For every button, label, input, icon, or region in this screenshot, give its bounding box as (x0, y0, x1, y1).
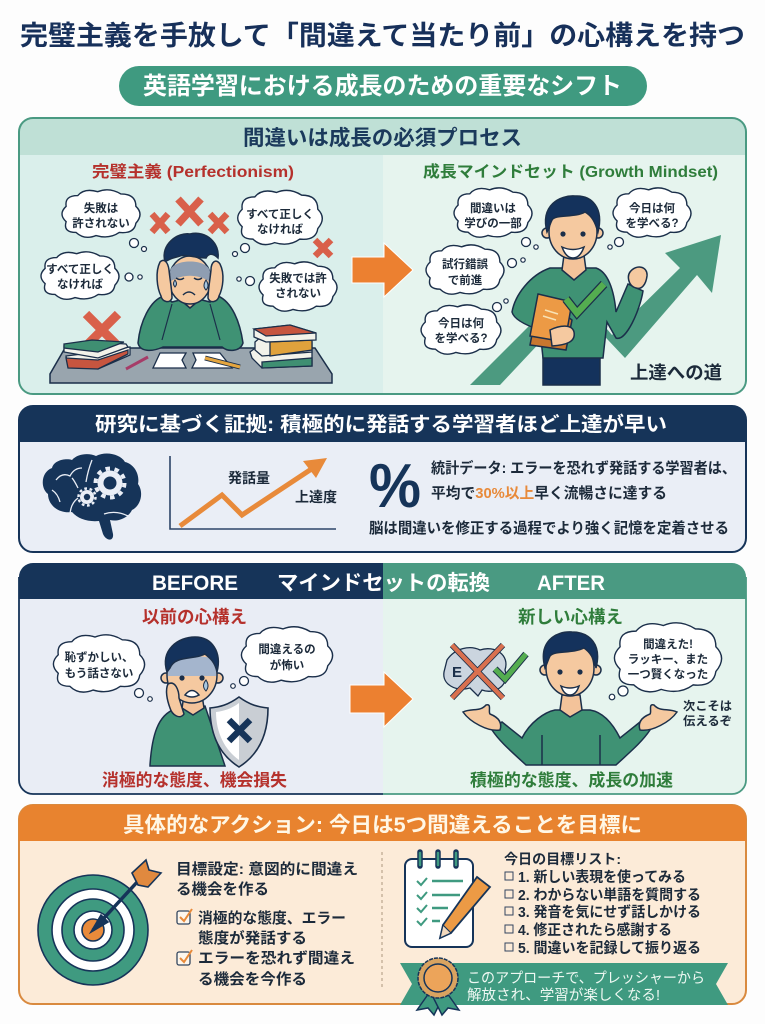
subtitle pill (119, 66, 647, 106)
icon: error speech bubble crossed out: E (452, 664, 462, 681)
thought bubble: 今日は何を学べる bottom (421, 299, 508, 354)
checklist item two: エラーを恐れず間違え (198, 949, 355, 967)
panel: concrete action (19, 805, 746, 1015)
thought bubble: 失敗では許されない: 失敗では許 (269, 271, 327, 285)
icon: medal (417, 958, 459, 1015)
thought bubble: 恥ずかしい: もう話さない (65, 666, 133, 680)
thought bubble: 間違えるのが怖い: 間違えるの (258, 642, 316, 656)
thought bubble: すべて正しくなければ left (41, 252, 142, 299)
thought bubble: 今日は何を学べる bottom: 今日は何 (438, 316, 484, 330)
thought bubble: 失敗は許されない (62, 190, 146, 252)
panel heading: 研究に基づく証拠: 積極的に発話する学習者ほど上達が早い (95, 412, 667, 436)
goal text: る機会を作る (176, 881, 269, 898)
panel: mistakes are essential (19, 118, 746, 394)
torn paper, pen and pencil (126, 353, 240, 369)
header: mindset shift: マインドセットの転換 (277, 572, 490, 595)
line chart: 上達度 (295, 489, 337, 505)
arrow: before to after (350, 672, 413, 727)
icon: shield with X (210, 697, 268, 767)
thought bubble: 間違えるのが怖い: が怖い (270, 658, 304, 672)
thought bubble: 間違いは学びの一部: 間違いは (470, 201, 516, 215)
thought bubble: 失敗では許されない: されない (275, 287, 321, 300)
ribbon banner (400, 963, 728, 1005)
confident student (512, 196, 647, 385)
checklist item one: 態度が発話する (198, 929, 307, 947)
icon: target with arrow (38, 860, 161, 985)
thought bubble: 間違えた: 間違えた! (643, 637, 693, 651)
desk (50, 348, 332, 383)
arrow: perfectionism to growth (352, 243, 413, 297)
checklist item two (177, 949, 355, 988)
goal list heading: 今日の目標リスト: (504, 851, 621, 867)
after heading: 新しい心構え (518, 607, 623, 627)
side note: 次こそは伝えるぞ: 伝えるぞ (683, 714, 732, 728)
thought bubble: 間違いは学びの一部 (454, 188, 538, 249)
before heading: 以前の心構え (142, 607, 247, 627)
icon: check mark on student (566, 284, 604, 313)
thought bubble: 恥ずかしい (53, 635, 152, 701)
thought bubble: 間違いは学びの一部: 学びの一部 (464, 216, 522, 230)
thought bubble: 今日は何を学べる top: を学べる? (625, 216, 679, 230)
panel: mindset shift (19, 563, 746, 794)
ribbon banner: このアプローチで、プレッシャーから (467, 970, 705, 987)
thought bubble: 恥ずかしい: 恥ずかしい、 (64, 650, 134, 664)
road label: 上達への道 (630, 363, 722, 383)
checklist item one: 消極的な態度、エラー (198, 909, 346, 927)
title: 完璧主義を手放して「間違えて当たり前」の心構えを持つ (20, 21, 745, 51)
thought bubble: 失敗では許されない (237, 262, 337, 311)
goal list items: 2. わからない単語を質問する (518, 886, 701, 904)
before caption: 消極的な態度、機会損失 (102, 771, 287, 790)
thought bubble: 間違えた: ラッキー、また (628, 653, 708, 666)
panel heading: 間違いは成長の必須プロセス (243, 126, 522, 150)
line chart: 発話量 (228, 470, 270, 486)
header: before: BEFORE (152, 572, 238, 595)
thought bubble: 失敗は許されない: 失敗は (84, 201, 119, 215)
icon: error speech bubble crossed out (444, 645, 526, 698)
thought bubble: すべて正しくなければ right (232, 190, 322, 256)
goal list items: 1. 新しい表現を使ってみる (518, 868, 686, 886)
after caption: 積極的な態度、成長の加速 (470, 770, 673, 790)
ribbon banner: 解放され、学習が楽しくなる! (467, 987, 660, 1004)
thought bubble: 試行錯誤で前進 (426, 245, 525, 294)
line chart (170, 456, 337, 529)
thought bubble: 間違えるのが怖い (231, 627, 333, 688)
thought bubble: 今日は何を学べる bottom: を学べる? (434, 331, 488, 345)
books right (250, 325, 316, 368)
perfectionism heading: 完璧主義 (Perfectionism) (92, 162, 294, 181)
thought bubble: 今日は何を学べる top (608, 188, 691, 249)
thought bubble: 試行錯誤で前進: 試行錯誤 (442, 257, 488, 271)
thought bubble: 失敗は許されない: 許されない (72, 216, 130, 230)
brain memory note: 脳は間違いを修正する過程でより強く記憶を定着させる (369, 519, 729, 537)
statistic text: 平均で30%以上早く流暢さに達する (431, 484, 667, 502)
subtitle pill: 英語学習における成長のための重要なシフト (143, 73, 622, 100)
icon: brain with gears (43, 454, 141, 540)
thought bubble: 試行錯誤で前進: で前進 (448, 273, 483, 287)
icon: clipboard with pencil (405, 852, 490, 947)
stressed student (138, 233, 243, 350)
thought bubble: 今日は何を学べる top: 今日は何 (629, 201, 675, 215)
thought bubble: すべて正しくなければ right: すべて正しく (246, 208, 314, 221)
icon: red X marks (86, 199, 331, 346)
growth arrow path (470, 235, 721, 385)
growth mindset heading: 成長マインドセット (Growth Mindset) (423, 162, 718, 181)
checklist item two: る機会を今作る (198, 970, 307, 988)
side note: 次こそは伝えるぞ (683, 698, 732, 728)
goal list items: 4. 修正されたら感謝する (518, 921, 672, 939)
thought bubble: すべて正しくなければ left: なければ (57, 277, 103, 291)
goal list items (505, 868, 701, 957)
checklist item one (177, 909, 346, 947)
header: after: AFTER (537, 572, 605, 595)
panel: research evidence (19, 406, 746, 552)
thought bubble: すべて正しくなければ right: なければ (257, 222, 303, 236)
statistic text: 統計データ: エラーを恐れず発話する学習者は、 (431, 459, 736, 477)
thought bubble: すべて正しくなければ left: すべて正しく (46, 263, 114, 276)
goal list items: 5. 間違いを記録して振り返る (518, 939, 701, 957)
thought bubble: 間違えた: 一つ賢くなった (628, 667, 708, 681)
icon: check mark inner (566, 284, 604, 313)
statistic text (431, 459, 736, 502)
books left (64, 340, 130, 369)
icon: percent sign: % (369, 452, 421, 521)
side note: 次こそは伝えるぞ: 次こそは (683, 698, 732, 713)
anxious student (150, 637, 225, 766)
happy student with open arms (463, 632, 677, 765)
panel heading: 具体的なアクション: 今日は5つ間違えることを目標に (123, 814, 642, 837)
thought bubble: 間違えた (609, 623, 722, 700)
goal list items: 3. 発音を気にせず話しかける (518, 903, 701, 921)
goal text (176, 860, 358, 898)
goal text: 目標設定: 意図的に間違え (176, 860, 358, 878)
